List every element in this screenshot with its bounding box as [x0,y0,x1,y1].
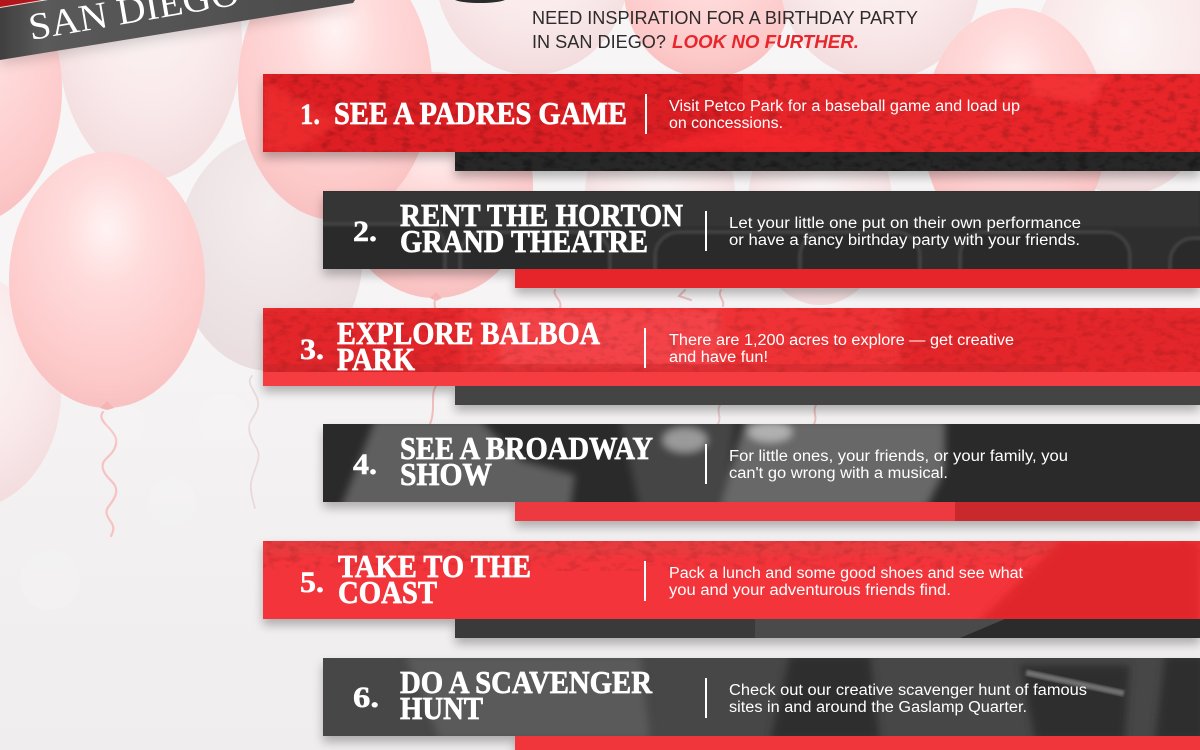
heading: SHOW [400,456,492,492]
divider [705,678,707,718]
theatre seats photo texture [323,220,1200,288]
heading: TAKE TO THE [338,548,531,584]
divider [705,444,707,484]
heading [400,430,653,492]
heading: DO A SCAVENGER [400,664,653,700]
panel 4: Broadway show [323,420,1200,521]
intro text: NEED INSPIRATION FOR A BIRTHDAY PARTY [532,7,918,28]
description: can't go wrong with a musical. [729,465,948,482]
faces photo texture [340,420,1200,521]
children photo texture [405,655,1200,750]
panel 6: scavenger hunt [323,655,1200,750]
description: Let your little one put on their own performance [729,215,1081,232]
description: Check out our creative scavenger hunt of famous [729,682,1087,699]
panel 2: Horton Grand Theatre [318,191,1200,300]
number: 4. [353,448,377,481]
panel 1: Padres game [263,74,1200,171]
description: you and your adventurous friends find. [669,582,951,599]
top banner: San Diego [0,0,355,60]
bokeh circles [20,394,251,610]
description: There are 1,200 acres to explore — get creative [669,332,1014,349]
heading: GRAND THEATRE [400,223,648,259]
divider [644,328,646,368]
banner ribbon red edge [0,0,42,7]
heading: EXPLORE BALBOA [337,315,600,351]
balloons background [0,0,1200,510]
number: 2. [353,215,377,248]
number: 1. [300,98,320,131]
description [669,332,1014,366]
description [729,215,1081,249]
description [669,565,1024,599]
intro text [532,7,918,52]
heading: PARK [337,341,415,377]
intro text: LOOK NO FURTHER. [672,31,859,52]
intro text: IN SAN DIEGO? [532,31,666,52]
divider [705,211,707,251]
panel 5: the coast [263,541,1200,638]
banner band [0,0,355,60]
heading [400,664,653,726]
heading: COAST [338,574,437,610]
heading [338,548,531,610]
main title remnant [455,0,505,3]
description: and have fun! [669,349,768,366]
description: sites in and around the Gaslamp Quarter. [729,699,1027,716]
description: Visit Petco Park for a baseball game and load up [669,98,1020,115]
description [729,448,1068,482]
divider [645,94,647,134]
description [669,98,1020,132]
divider [644,561,646,601]
description [729,682,1087,716]
balloon ribbons [101,290,816,536]
heading [400,197,683,259]
heading: HUNT [400,690,483,726]
number: 6. [353,681,379,714]
heading: RENT THE HORTON [400,197,683,233]
heading: SEE A PADRES GAME [334,95,627,131]
description: on concessions. [669,115,783,132]
number: 3. [300,333,324,366]
coast photo texture [263,541,1200,638]
number: 5. [300,566,324,599]
description: or have a fancy birthday party with your friends. [729,232,1080,249]
description: Pack a lunch and some good shoes and see what [669,565,1024,582]
heading: SEE A BROADWAY [400,430,653,466]
description: For little ones, your friends, or your family, you [729,448,1068,465]
panel 3: Balboa Park [263,308,1200,405]
park photo texture [263,308,1200,405]
heading [337,315,600,377]
stadium photo texture [263,74,1200,171]
